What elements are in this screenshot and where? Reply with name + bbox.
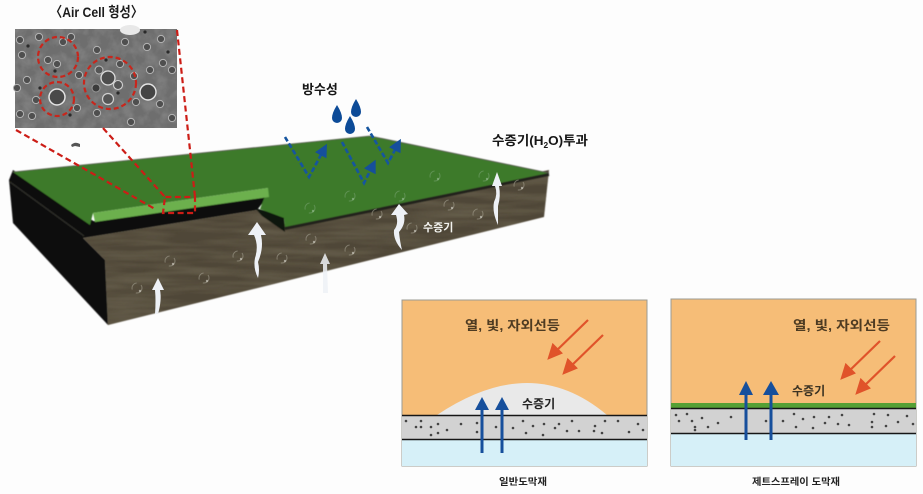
- bounce path 1: [285, 137, 322, 177]
- bounce path 3: [367, 127, 396, 163]
- vapor blister: [437, 383, 607, 415]
- layer lines: [402, 416, 647, 440]
- arrow 3: [320, 253, 330, 293]
- heading: vapor permeability: 2: [544, 141, 549, 150]
- illustration: layered roof block: [9, 136, 549, 325]
- label: heat, light, UV: 열, 빛, 자외선등: [793, 318, 890, 333]
- label: vapor on substrate: 수증기: [423, 220, 453, 234]
- water vapor bubbles: [132, 171, 524, 293]
- blue vapor arrows: [475, 397, 509, 453]
- left black side face: [9, 170, 108, 325]
- arrow 4: [391, 204, 408, 250]
- label: vapor: 수증기: [522, 396, 555, 411]
- heading: vapor permeability: O)투과: [548, 133, 588, 148]
- large air cells: [49, 89, 65, 105]
- lip line on left side: [10, 182, 84, 236]
- concrete layer: [671, 408, 916, 433]
- aggregate dots: [405, 420, 644, 436]
- water layer: [402, 440, 647, 466]
- dark edge below green membrane: [285, 174, 549, 228]
- red dashed zoom callout lines: [16, 30, 195, 213]
- red heat arrows: [549, 320, 603, 373]
- label: heat, light, UV: 열, 빛, 자외선등: [465, 318, 560, 333]
- panel: zero spray coating: [671, 299, 916, 488]
- micrograph: air cell surface: [13, 25, 177, 128]
- black shadow under peeled membrane: [83, 195, 269, 238]
- white vapor arrows: [152, 172, 502, 314]
- heading: Air Cell: 〈Air Cell 형성〉: [50, 4, 143, 20]
- arrow 5: [492, 172, 502, 225]
- water layer: [671, 434, 916, 466]
- bounce path 2: [342, 142, 371, 183]
- brown substrate front face: [83, 170, 549, 325]
- top edge hairline: [13, 136, 549, 173]
- water repellency dashed blue arrows: [285, 127, 396, 183]
- panel: conventional coating: [402, 300, 647, 488]
- green membrane top surface: [13, 136, 549, 227]
- panel background: [402, 300, 647, 466]
- caption: 일반도막재: [499, 476, 547, 488]
- label: vapor: 수증기: [792, 383, 825, 398]
- blue vapor arrows: [739, 381, 779, 440]
- small speck: [71, 143, 80, 147]
- green membrane: [671, 403, 916, 408]
- red dashed circles: [38, 37, 136, 116]
- layer lines: [671, 408, 916, 434]
- icon: water drops: [332, 99, 361, 134]
- light green peeled strip: [93, 188, 269, 222]
- heading: waterproofing: 방수성: [302, 82, 338, 97]
- panel background: [671, 299, 916, 466]
- heading: vapor permeability: 수증기(H: [492, 133, 542, 148]
- arrow 1: [152, 278, 164, 314]
- caption: 제트스프레이 도막재: [752, 476, 840, 488]
- concrete layer: [402, 415, 647, 439]
- aggregate dots: [675, 413, 914, 431]
- red heat arrows: [842, 341, 895, 393]
- arrow 2: [248, 222, 266, 278]
